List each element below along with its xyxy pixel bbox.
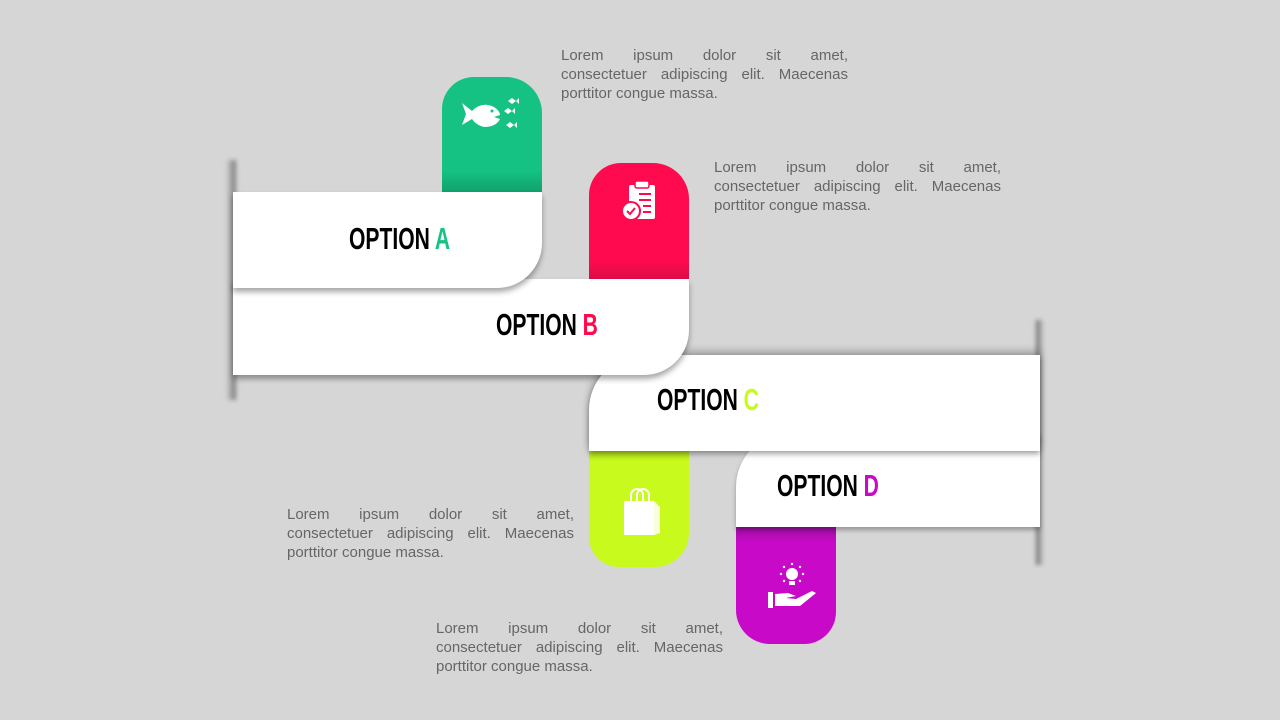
- tab B red: [589, 163, 689, 293]
- ribbon A body: [233, 192, 542, 288]
- icon: shopping bag: [624, 488, 660, 535]
- text block D: porttitor congue massa.: [436, 658, 593, 675]
- tab D magenta: [736, 520, 836, 644]
- text block A: Lorem ipsum dolor sit amet,: [561, 47, 848, 64]
- text block B: Lorem ipsum dolor sit amet,: [714, 159, 1001, 176]
- tab A green: [442, 77, 542, 202]
- text block C: consectetuer adipiscing elit. Maecenas: [287, 525, 574, 542]
- text block D: consectetuer adipiscing elit. Maecenas: [436, 639, 723, 656]
- icon: clipboard check: [623, 182, 655, 219]
- tab C lime: [589, 443, 689, 567]
- left edge shadow: [226, 160, 236, 400]
- text block C: porttitor congue massa.: [287, 544, 444, 561]
- text block D: [436, 620, 723, 675]
- right edge shadow: [1036, 320, 1044, 565]
- text block D: Lorem ipsum dolor sit amet,: [436, 620, 723, 637]
- text block A: [561, 47, 848, 102]
- text block A: consectetuer adipiscing elit. Maecenas: [561, 66, 848, 83]
- label: OPTION D: OPTION D: [777, 468, 879, 503]
- text block B: [714, 159, 1001, 214]
- text block A: porttitor congue massa.: [561, 85, 718, 102]
- label: OPTION B: OPTION B: [496, 307, 598, 342]
- icon: hand with lightbulb: [768, 562, 816, 608]
- text block B: porttitor congue massa.: [714, 197, 871, 214]
- label: OPTION A: OPTION A: [349, 221, 450, 256]
- text block B: consectetuer adipiscing elit. Maecenas: [714, 178, 1001, 195]
- icon: fish: [462, 98, 519, 128]
- text block C: [287, 506, 574, 561]
- ribbon B body: [233, 279, 689, 375]
- ribbon D body: [736, 432, 1040, 527]
- label: OPTION C: OPTION C: [657, 382, 759, 417]
- text block C: Lorem ipsum dolor sit amet,: [287, 506, 574, 523]
- ribbon C body: [589, 355, 1040, 451]
